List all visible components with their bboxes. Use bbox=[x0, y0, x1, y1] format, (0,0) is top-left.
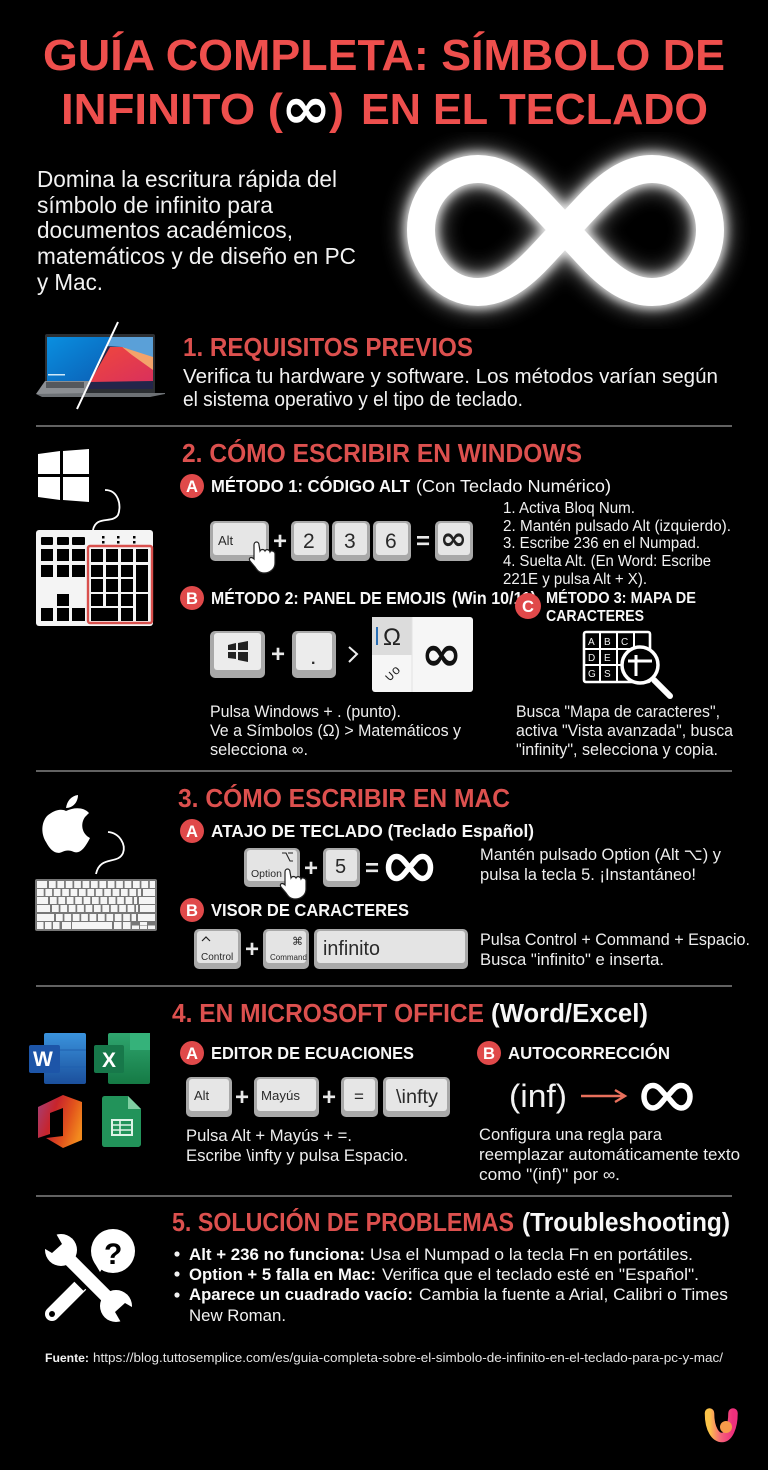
method 2 text: Pulsa Windows + . (punto). bbox=[210, 703, 401, 721]
visor text: Pulsa Control + Command + Espacio. bbox=[480, 931, 750, 949]
badge B office bbox=[477, 1041, 501, 1065]
editor heading: EDITOR DE ECUACIONES bbox=[211, 1043, 414, 1063]
inf arrow infinity: (inf) bbox=[509, 1078, 567, 1114]
icon: character map magnifier bbox=[584, 632, 670, 696]
badge A mac bbox=[180, 819, 204, 843]
icon: character map magnifier: C bbox=[621, 637, 628, 648]
section 1: requisitos bbox=[183, 334, 718, 411]
visor text: Busca "infinito" e inserta. bbox=[480, 951, 664, 969]
icon: word bbox=[29, 1033, 86, 1084]
section 4 heading bbox=[172, 1000, 648, 1028]
method 3 text: activa "Vista avanzada", busca bbox=[516, 722, 734, 740]
keys: alt 2 3 6 infinity bbox=[210, 521, 473, 561]
keys: alt mayus equals infty: + bbox=[322, 1084, 336, 1111]
troubleshooting list: Cambia la fuente a Arial, Calibri o Times bbox=[419, 1286, 728, 1304]
title: ∞ bbox=[281, 74, 331, 142]
method 1 heading: MÉTODO 1: CÓDIGO ALT bbox=[211, 475, 410, 496]
editor text bbox=[186, 1127, 408, 1165]
icon: character map magnifier: D bbox=[588, 653, 595, 664]
autocorreccion text: reemplazar automáticamente texto bbox=[479, 1146, 740, 1164]
icon: keyboard with highlighted numpad bbox=[36, 490, 153, 626]
method 2 heading: MÉTODO 2: PANEL DE EMOJIS bbox=[211, 587, 446, 608]
method 1 steps: 2. Mantén pulsado Alt (izquierdo). bbox=[503, 518, 731, 535]
keys: control command infinito: Command bbox=[270, 953, 307, 962]
troubleshooting list: Verifica que el teclado esté en "Español". bbox=[382, 1266, 699, 1284]
keys: control command infinito: ⌘ bbox=[292, 936, 303, 948]
troubleshooting list bbox=[174, 1246, 728, 1325]
icon: sheets bbox=[102, 1096, 141, 1147]
icon: wrench, screwdriver and question bubble: ? bbox=[104, 1238, 122, 1271]
method 3 text bbox=[516, 703, 734, 759]
emoji panel: Ω bbox=[383, 624, 401, 651]
icon: character map magnifier: S bbox=[604, 669, 611, 680]
badge B mac: B bbox=[186, 901, 198, 920]
section 4 heading: (Word/Excel) bbox=[491, 1000, 648, 1028]
method 3 heading: CARACTERES bbox=[546, 608, 644, 625]
intro text: y Mac. bbox=[37, 269, 103, 295]
keys: windows plus dot: + bbox=[271, 641, 285, 668]
section 1: requisitos: 1. REQUISITOS PREVIOS bbox=[183, 334, 473, 362]
intro text: Domina la escritura rápida del bbox=[37, 166, 337, 192]
keys: control command infinito bbox=[194, 929, 468, 969]
icon: character map magnifier: B bbox=[604, 637, 611, 648]
autocorreccion text: como "(inf)" por ∞. bbox=[479, 1166, 620, 1184]
keys: alt mayus equals infty: = bbox=[354, 1087, 364, 1106]
emoji panel: ∞ bbox=[421, 626, 462, 682]
keys: windows plus dot bbox=[210, 631, 357, 678]
troubleshooting list: Alt + 236 no funciona: bbox=[189, 1246, 365, 1264]
method 3 heading bbox=[546, 588, 696, 625]
emoji panel bbox=[372, 617, 473, 692]
badge A office: A bbox=[186, 1044, 198, 1063]
icon: excel: X bbox=[102, 1049, 116, 1072]
editor text: Escribe \infty y pulsa Espacio. bbox=[186, 1147, 408, 1165]
section 1: requisitos: Verifica tu hardware y software. Los métodos varían según bbox=[183, 365, 718, 388]
method 1 heading: (Con Teclado Numérico) bbox=[416, 476, 611, 496]
icon: hand cursor on option bbox=[280, 869, 306, 899]
icon: office bbox=[38, 1095, 82, 1148]
method 2 text: selecciona ∞. bbox=[210, 741, 308, 759]
icon: windows logo bbox=[38, 449, 89, 502]
intro text: símbolo de infinito para bbox=[37, 192, 273, 218]
keys: alt 2 3 6 infinity: 2 bbox=[303, 530, 315, 553]
section 3 heading: 3. CÓMO ESCRIBIR EN MAC bbox=[178, 783, 510, 813]
keys: control command infinito: + bbox=[245, 936, 259, 963]
keys: alt mayus equals infty: \infty bbox=[396, 1087, 439, 1108]
icon: character map magnifier: E bbox=[604, 653, 611, 664]
visor heading: VISOR DE CARACTERES bbox=[211, 900, 409, 920]
badge C bbox=[515, 593, 541, 619]
badge B office: B bbox=[483, 1044, 495, 1063]
keys: alt mayus equals infty bbox=[186, 1077, 450, 1117]
badge A windows: A bbox=[186, 477, 198, 496]
keys: alt 2 3 6 infinity: + bbox=[273, 528, 287, 555]
inf arrow infinity bbox=[509, 1078, 690, 1114]
title: EN EL TECLADO bbox=[361, 85, 708, 134]
badge A windows bbox=[180, 474, 204, 498]
method 1 steps: 3. Escribe 236 en el Numpad. bbox=[503, 535, 700, 552]
intro text: matemáticos y de diseño en PC bbox=[37, 243, 356, 269]
title: GUÍA COMPLETA: SÍMBOLO DE bbox=[43, 30, 725, 80]
section 5 heading: 5. SOLUCIÓN DE PROBLEMAS bbox=[172, 1207, 514, 1237]
keys: option 5 infinity: Option bbox=[251, 868, 282, 880]
icon: character map magnifier: A bbox=[588, 637, 595, 648]
keys: option 5 infinity: + bbox=[304, 855, 318, 882]
option text bbox=[480, 846, 722, 884]
autocorreccion heading: AUTOCORRECCIÓN bbox=[508, 1042, 670, 1063]
icon: glowing infinity bbox=[421, 169, 710, 292]
autocorreccion text: Configura una regla para bbox=[479, 1126, 663, 1144]
intro text bbox=[37, 166, 356, 295]
icon: apple logo bbox=[42, 795, 90, 853]
badge A office bbox=[180, 1041, 204, 1065]
title: ) bbox=[329, 85, 344, 134]
method 1 steps bbox=[503, 500, 731, 588]
keys: option 5 infinity: = bbox=[365, 855, 379, 882]
method 2 text bbox=[210, 703, 462, 759]
method 2 heading: (Win 10/11) bbox=[452, 588, 536, 608]
keys: alt 2 3 6 infinity: ∞ bbox=[440, 521, 467, 557]
keys: control command infinito: infinito bbox=[323, 938, 380, 960]
icon: character map magnifier: G bbox=[588, 669, 596, 680]
method 1 heading bbox=[211, 475, 611, 496]
method 1 steps: 4. Suelta Alt. (En Word: Escribe bbox=[503, 553, 711, 570]
intro text: documentos académicos, bbox=[37, 217, 293, 243]
method 1 steps: 221E y pulsa Alt + X). bbox=[503, 571, 647, 588]
option text: Mantén pulsado Option (Alt ⌥) y bbox=[480, 846, 722, 864]
option text: pulsa la tecla 5. ¡Instantáneo! bbox=[480, 866, 696, 884]
method 2 text: Ve a Símbolos (Ω) > Matemáticos y bbox=[210, 722, 462, 740]
badge B windows: B bbox=[186, 589, 198, 608]
method 3 text: "infinity", selecciona y copia. bbox=[516, 741, 718, 759]
section 5 heading: (Troubleshooting) bbox=[522, 1209, 730, 1237]
logo bbox=[710, 1413, 733, 1438]
title bbox=[43, 30, 725, 142]
badge B windows bbox=[180, 586, 204, 610]
icon: hand cursor on alt bbox=[249, 542, 275, 573]
section 1: requisitos: el sistema operativo y el tipo de teclado. bbox=[183, 388, 523, 411]
section 5 heading bbox=[172, 1207, 730, 1237]
icon: laptop split windows and mac bbox=[36, 322, 165, 409]
icon: word: W bbox=[33, 1048, 53, 1071]
section 4 heading: 4. EN MICROSOFT OFFICE bbox=[172, 1000, 484, 1028]
keys: alt 2 3 6 infinity: 3 bbox=[344, 530, 356, 553]
section 2 heading: 2. CÓMO ESCRIBIR EN WINDOWS bbox=[182, 438, 582, 468]
method 3 heading: MÉTODO 3: MAPA DE bbox=[546, 588, 696, 607]
source: Fuente: bbox=[45, 1351, 89, 1365]
title: INFINITO ( bbox=[61, 85, 283, 134]
icon: wrench, screwdriver and question bubble bbox=[35, 1225, 142, 1331]
troubleshooting list: Usa el Numpad o la tecla Fn en portátiles. bbox=[370, 1246, 693, 1264]
emoji panel: ∪o bbox=[381, 662, 403, 685]
troubleshooting list: Option + 5 falla en Mac: bbox=[189, 1266, 376, 1284]
keys: alt mayus equals infty: Mayús bbox=[261, 1088, 301, 1103]
source: https://blog.tuttosemplice.com/es/guia-completa-sobre-el-simbolo-de-infinito-en-el-teclado-para-pc-y-mac/ bbox=[93, 1351, 724, 1365]
badge C: C bbox=[522, 597, 534, 616]
badge A mac: A bbox=[186, 822, 198, 841]
keys: alt 2 3 6 infinity: = bbox=[416, 528, 430, 555]
keys: option 5 infinity: 5 bbox=[335, 856, 346, 878]
method 3 text: Busca "Mapa de caracteres", bbox=[516, 703, 720, 721]
badge B mac bbox=[180, 898, 204, 922]
troubleshooting list: Aparece un cuadrado vacío: bbox=[189, 1286, 413, 1304]
troubleshooting list: New Roman. bbox=[189, 1307, 286, 1325]
editor text: Pulsa Alt + Mayús + =. bbox=[186, 1127, 352, 1145]
keys: alt 2 3 6 infinity: 6 bbox=[385, 530, 397, 553]
keys: control command infinito: Control bbox=[201, 952, 233, 963]
keys: alt mayus equals infty: Alt bbox=[194, 1088, 210, 1103]
keys: alt mayus equals infty: + bbox=[235, 1084, 249, 1111]
autocorreccion text bbox=[479, 1126, 740, 1184]
keys: alt 2 3 6 infinity: Alt bbox=[218, 533, 234, 548]
keys: windows plus dot: . bbox=[311, 651, 315, 668]
visor text bbox=[480, 931, 750, 969]
atajo heading: ATAJO DE TECLADO (Teclado Español) bbox=[211, 821, 534, 841]
icon: mac keyboard bbox=[35, 832, 157, 931]
method 1 steps: 1. Activa Bloq Num. bbox=[503, 500, 635, 517]
icon: excel bbox=[94, 1033, 150, 1084]
keys: option 5 infinity bbox=[244, 848, 430, 887]
